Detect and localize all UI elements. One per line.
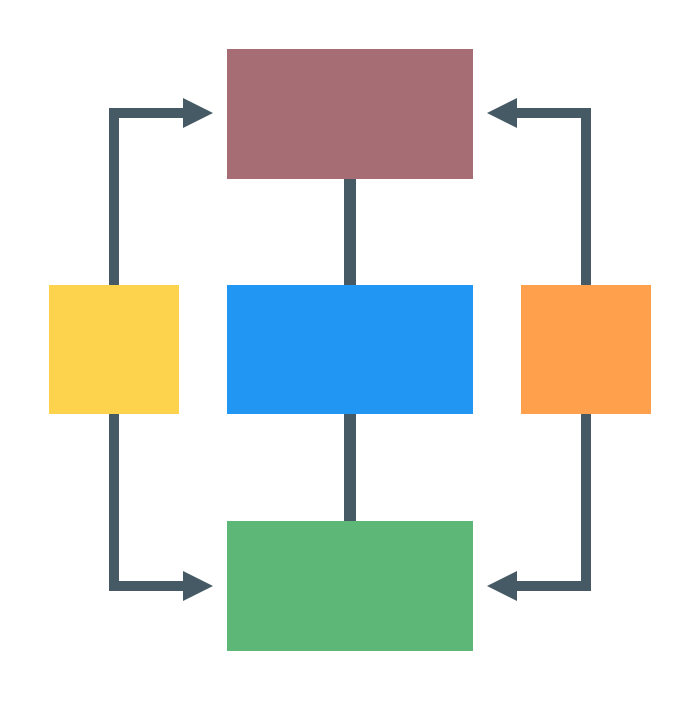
arrow: left up (114, 98, 213, 285)
box: center (227, 285, 473, 414)
arrow: right up (487, 98, 586, 285)
box: left (49, 285, 179, 414)
box: right (521, 285, 651, 414)
arrow: right down (487, 414, 586, 601)
box: top (227, 49, 473, 179)
connector: middle to bottom (344, 410, 356, 525)
box: bottom (227, 521, 473, 651)
connector: top to middle (344, 175, 356, 290)
arrow: left down (114, 414, 213, 601)
